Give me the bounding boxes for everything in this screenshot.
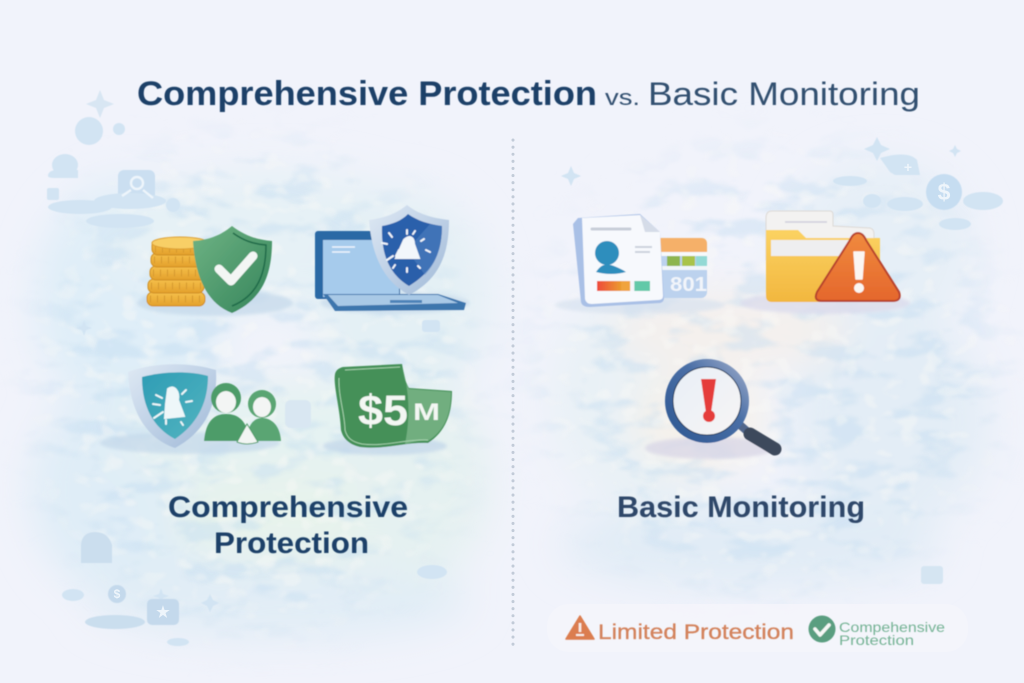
- icon: $5M green badge: [323, 364, 452, 455]
- icon: $5M green badge: $5: [358, 387, 408, 435]
- icon: document and 801 card: 801: [670, 274, 707, 296]
- title: Basic Monitoring: [648, 76, 920, 112]
- background wash: [25, 90, 1004, 646]
- mottled blotches: [36, 152, 999, 600]
- heading: comprehensive protection: [168, 491, 408, 560]
- faint icon marks: [114, 159, 951, 621]
- icon: magnifier with exclamation: [645, 363, 775, 459]
- icon: laptop with blue alert shield: [315, 205, 470, 314]
- faint icon marks: $: [114, 587, 121, 601]
- title: Comprehensive Protection: [137, 75, 597, 113]
- legend: [547, 604, 968, 652]
- faint background icons: [47, 90, 1003, 646]
- heading: comprehensive protection: Comprehensive: [168, 491, 408, 524]
- faint icon marks: ★: [156, 604, 170, 621]
- panel: comprehensive protection: [100, 205, 470, 560]
- legend: comprehensive protection: Protection: [839, 632, 914, 648]
- icon: folder with warning triangle: [740, 211, 910, 314]
- legend: limited protection: [566, 616, 794, 644]
- legend background pill: [547, 604, 968, 652]
- heading: basic monitoring: Basic Monitoring: [617, 491, 865, 524]
- faint magnifier mark: [122, 177, 153, 198]
- legend: comprehensive protection: Compehensive: [839, 619, 945, 635]
- faint icon marks: +: [904, 159, 912, 175]
- center divider: [512, 140, 514, 648]
- legend: limited protection: Limited Protection: [598, 621, 794, 644]
- title: vs.: [605, 85, 640, 110]
- faint icon marks: $: [938, 179, 951, 205]
- legend: comprehensive protection: [808, 616, 945, 648]
- icon: coins and green check shield: [137, 226, 293, 316]
- heading: comprehensive protection: Protection: [214, 527, 369, 560]
- icon: teal shield and people: [100, 364, 281, 454]
- panel: basic monitoring: [555, 211, 910, 524]
- title: [137, 75, 920, 113]
- icon: document and 801 card: [555, 214, 725, 314]
- icon: $5M green badge: M: [413, 399, 440, 426]
